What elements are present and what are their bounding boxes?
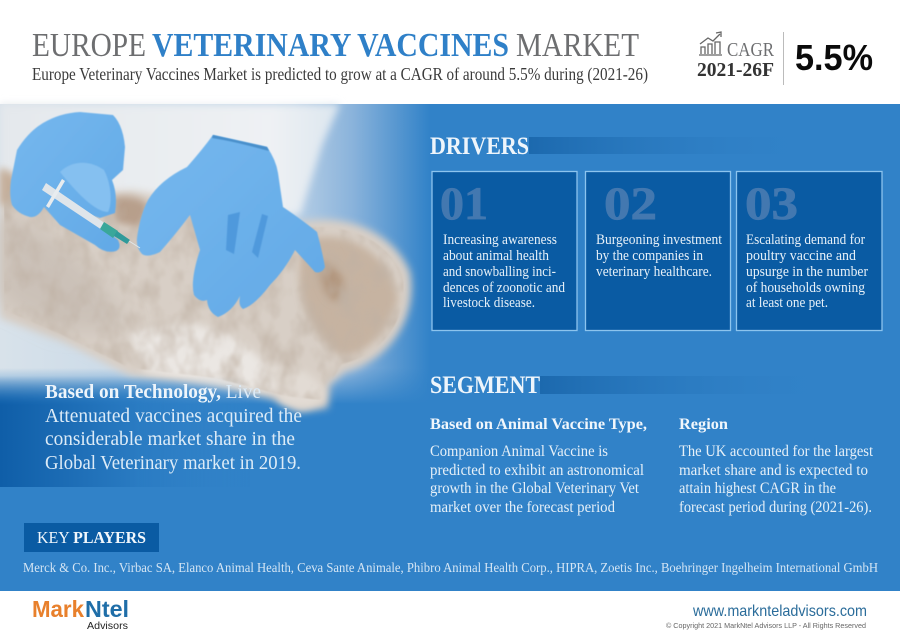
panel: driver 01: Increasing awareness: [443, 232, 557, 248]
text block: region: market share and is expected to: [679, 462, 868, 479]
subtitle: Europe Veterinary Vaccines Market is predicted to grow at a CAGR of around 5.5% during (2021-26): [32, 64, 648, 85]
heading: drivers: DRIVERS: [430, 133, 529, 160]
text block: region: attain highest CAGR in the: [679, 480, 836, 497]
CAGR badge: 2021-26F: [697, 59, 774, 81]
logo: MarkNtel Advisors: [32, 596, 129, 632]
panel: driver 01: dences of zoonotic and: [443, 280, 566, 296]
panel: driver 03: [736, 172, 882, 330]
text block: animal vaccine type: growth in the Global Veterinary Vet: [430, 480, 640, 497]
heading: segment: SEGMENT: [430, 372, 540, 399]
panel: driver 01: [432, 172, 577, 330]
panel: driver 02: 02: [604, 178, 657, 230]
callout: technology: Global Veterinary market in 2019.: [45, 453, 301, 474]
panel: driver 02: Burgeoning investment: [596, 232, 722, 248]
title: MARKET: [516, 27, 639, 64]
photo: gloved hands vaccinating a dog: [0, 104, 430, 412]
panel: driver 01: and snowballing inci-: [443, 264, 556, 280]
icon: right glove: [137, 135, 325, 317]
heading: segment: [430, 372, 840, 399]
callout: technology: Attenuated vaccines acquired the: [45, 406, 302, 427]
CAGR badge: 5.5%: [795, 37, 873, 78]
key players label: [24, 523, 159, 552]
panel: driver 03: of households owning: [746, 280, 865, 296]
logo: MarkNtel Advisors: Ntel: [85, 596, 129, 622]
panel: driver 03: 03: [745, 178, 798, 230]
text block: region: The UK accounted for the largest: [679, 443, 874, 460]
logo: MarkNtel Advisors: Advisors: [87, 620, 128, 632]
title: [32, 27, 639, 64]
panel: driver 01: 01: [440, 178, 488, 230]
text block: animal vaccine type: predicted to exhibit an astronomical: [430, 462, 644, 479]
website: www.marknteladvisors.com: [692, 603, 867, 620]
title: VETERINARY VACCINES: [152, 27, 509, 64]
icon: growth chart: [699, 32, 722, 55]
text block: animal vaccine type: market over the forecast period: [430, 499, 615, 516]
fur texture: [4, 190, 404, 400]
icon: syringe: [42, 179, 140, 248]
panel: driver 02: [586, 172, 730, 330]
text block: animal vaccine type: Companion Animal Vaccine is: [430, 443, 608, 460]
callout: technology: considerable market share in the: [45, 429, 295, 450]
callout: technology: [45, 382, 302, 474]
text block: animal vaccine type: Based on Animal Vaccine Type,: [430, 416, 647, 433]
key players label: KEY PLAYERS: [37, 528, 146, 547]
CAGR badge: CAGR: [727, 39, 775, 61]
blue main panel: [0, 104, 900, 591]
bottom-left dark gradient panel: [0, 376, 250, 487]
logo: MarkNtel Advisors: Mark: [32, 596, 84, 622]
icon: left glove: [10, 112, 125, 252]
panel: driver 02: by the companies in: [596, 248, 704, 264]
panel: driver 03: at least one pet.: [746, 295, 828, 311]
title: EUROPE: [32, 27, 146, 64]
text block: region: forecast period during (2021-26).: [679, 499, 872, 516]
panel: driver 01: about animal health: [443, 248, 550, 264]
callout: technology: Based on Technology, Live: [45, 382, 261, 403]
panel: driver 02: veterinary healthcare.: [596, 264, 712, 280]
CAGR badge: [697, 32, 873, 85]
copyright: © Copyright 2021 MarkNtel Advisors LLP - All Rights Reserved: [666, 621, 866, 630]
panel: driver 03: upsurge in the number: [746, 264, 868, 280]
text block: region: Region: [679, 416, 728, 433]
text block: region: [679, 416, 874, 516]
panel: driver 01: livestock disease.: [443, 295, 535, 311]
heading: drivers: [430, 133, 819, 160]
panel: driver 03: poultry vaccine and: [746, 248, 857, 264]
text block: animal vaccine type: [430, 416, 647, 516]
panel: driver 03: Escalating demand for: [746, 232, 865, 248]
